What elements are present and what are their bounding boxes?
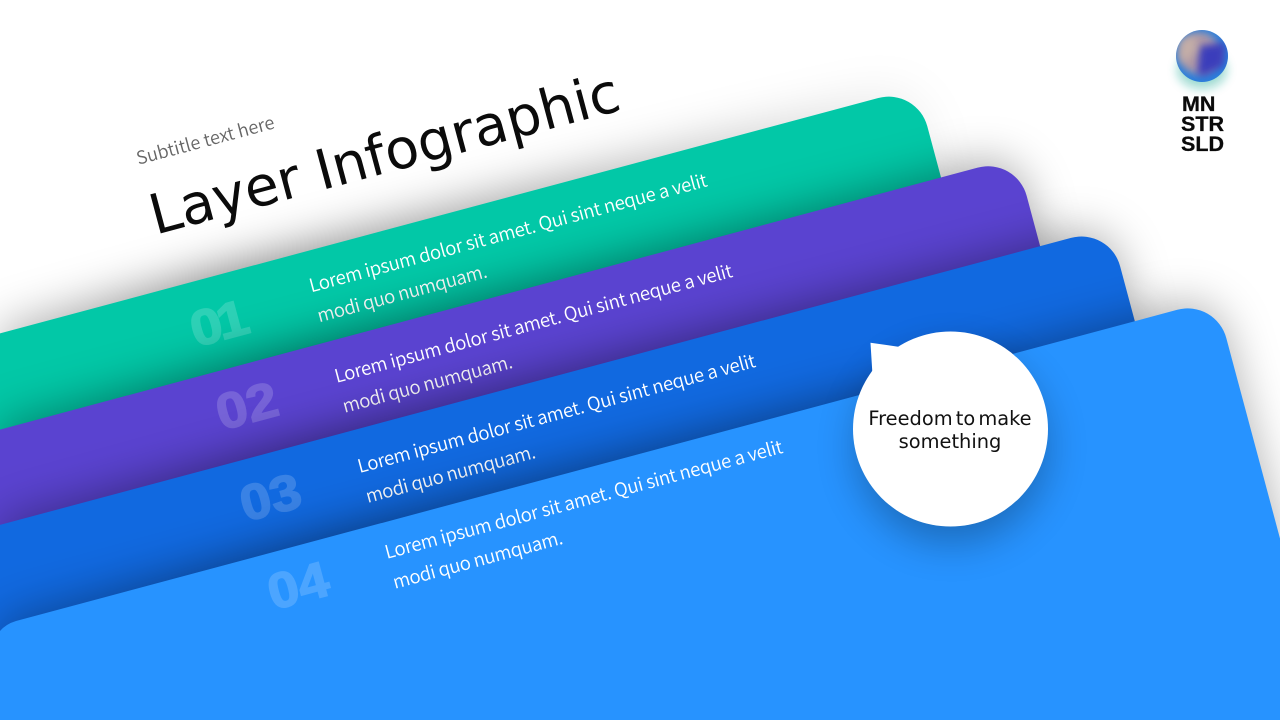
subtitle: Subtitle text here	[133, 109, 277, 171]
panel: layer 03	[0, 232, 1139, 642]
layer 01 number: 01	[184, 290, 254, 358]
panel: layer 04	[0, 304, 1280, 720]
callout: speech bubble: Freedom to make	[868, 407, 1032, 430]
layer 01 text: modi quo numquam.	[314, 258, 490, 328]
layer 03 number: 03	[234, 463, 307, 533]
layer 04 text: Lorem ipsum dolor sit amet. Qui sint neque a velit	[382, 433, 786, 565]
logo text: MN	[1182, 92, 1215, 116]
icon: sphere	[1176, 30, 1228, 89]
callout: speech bubble: something	[899, 430, 1001, 453]
layer 03 text: Lorem ipsum dolor sit amet. Qui sint neque a velit	[355, 347, 758, 479]
logo	[1176, 30, 1228, 156]
layer 02 number: 02	[210, 371, 284, 441]
layer 02 text: modi quo numquam.	[339, 348, 515, 419]
layer 03 text: modi quo numquam.	[363, 438, 538, 509]
layer 04 text: modi quo numquam.	[390, 524, 565, 595]
logo text: SLD	[1181, 132, 1224, 156]
title: Layer Infographic	[143, 61, 627, 248]
layer 01 text: Lorem ipsum dolor sit amet. Qui sint neque a velit	[306, 167, 710, 298]
layer 02 text: Lorem ipsum dolor sit amet. Qui sint neque a velit	[331, 257, 735, 389]
panel: layer 02	[0, 161, 1046, 549]
logo text: STR	[1181, 112, 1224, 136]
callout: speech bubble	[853, 332, 1048, 543]
layer 04 number: 04	[262, 551, 335, 621]
panel: layer 01	[0, 92, 947, 456]
